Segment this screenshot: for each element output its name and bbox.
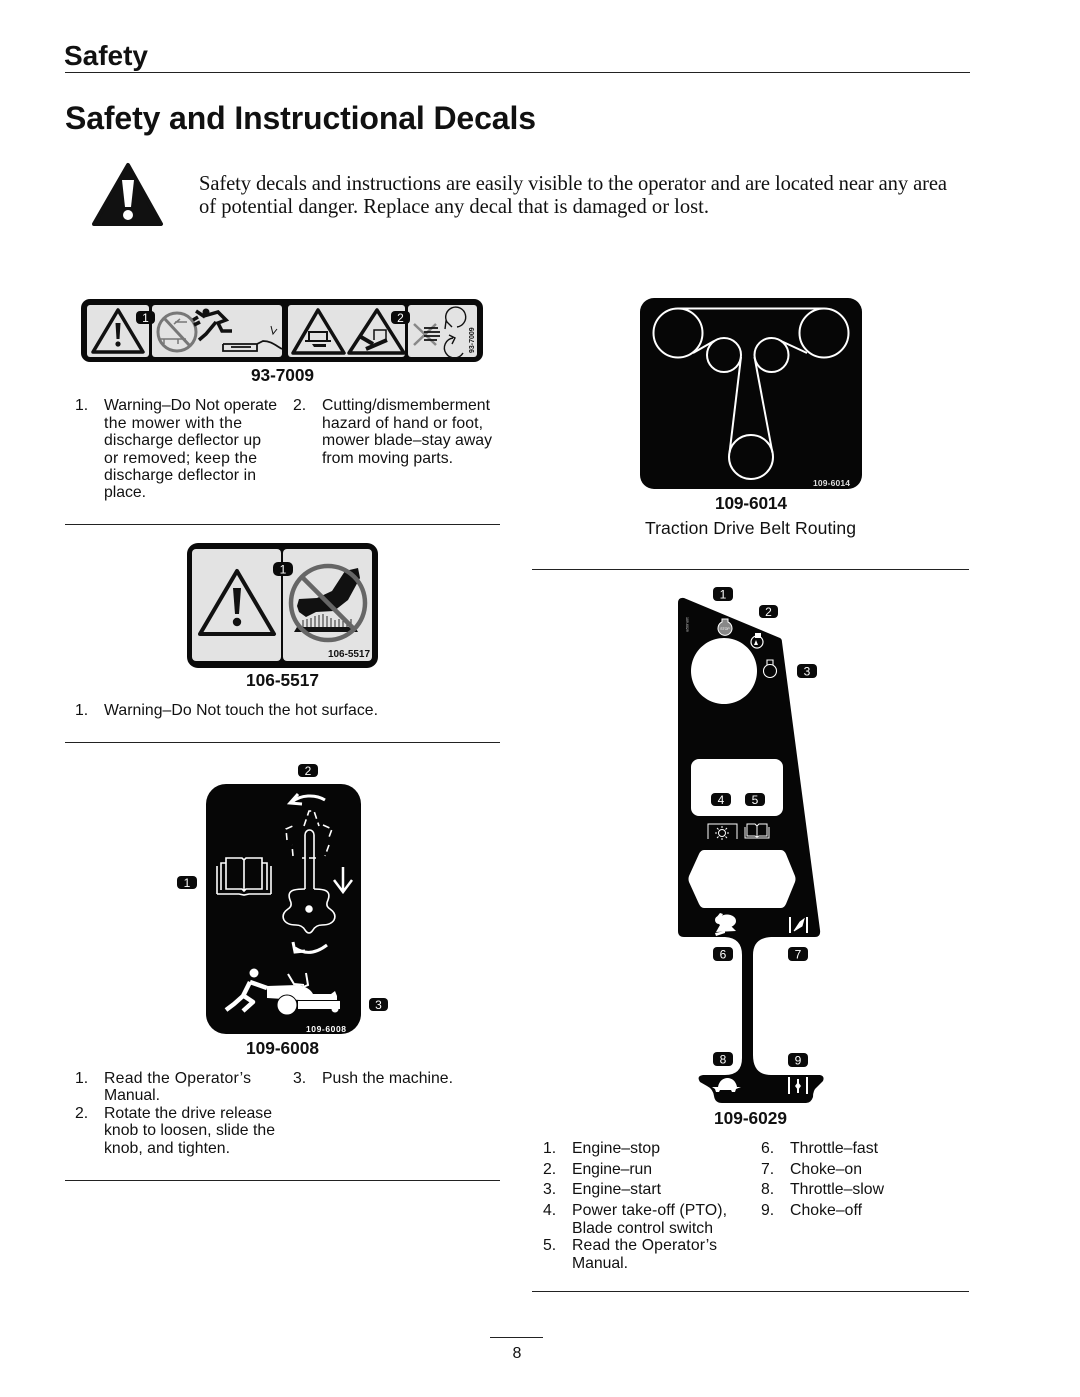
legend: 93-7009: 2. [293,397,306,414]
legend: 109-6008: 2. [75,1105,88,1122]
legend: 93-7009 [75,397,492,501]
legend: 106-5517: 1. [75,702,88,719]
decal number 93-7009: 93-7009 [251,365,314,385]
decal: 109-6029 control panel: 2 [765,605,772,619]
section heading: Safety: Safety [64,40,148,71]
decal: 109-6029 control panel: 1 [720,588,727,602]
legend: 109-6008: 1. [75,1070,88,1087]
decal: 106-5517 [187,543,378,668]
legend: 93-7009: or removed; keep the [104,450,257,467]
legend: 109-6029: 9. [761,1202,774,1219]
decal: 109-6008: 3 [375,998,382,1012]
decal: 109-6029 control panel: 6 [720,948,727,962]
legend: 109-6029: Throttle–slow [790,1181,885,1198]
icon: engine stop: STOP [720,627,730,631]
decal: 109-6008 [177,764,388,1034]
icon: warning triangle [94,165,161,224]
intro text: of potential danger. Replace any decal that is damaged or lost. [199,196,709,218]
legend: 109-6029: Engine–stop [572,1140,660,1157]
decal: 93-7009: 93-7009 [469,327,476,353]
legend: 109-6008: Rotate the drive release [104,1105,272,1122]
decal: 109-6029 control panel: 3 [804,664,811,678]
legend: 93-7009: discharge deflector in [104,467,256,484]
legend: 109-6029: Throttle–fast [790,1140,879,1157]
decal: 93-7009: 2 [397,311,404,325]
legend: 109-6029: Blade control switch [572,1220,713,1237]
legend: 109-6029: 7. [761,1161,774,1178]
icon: release knob [283,794,352,952]
legend: 93-7009: place. [104,484,146,501]
legend: 109-6029: 1. [543,1140,556,1157]
page number: 8 [513,1345,522,1362]
icon: engine stop [718,619,732,635]
icon: book small [745,824,769,838]
legend: 109-6008: knob to loosen, slide the [104,1122,275,1139]
decal: 109-6014 belt routing [640,298,862,489]
legend: 93-7009: from moving parts. [322,450,453,467]
decal number 106-5517: 106-5517 [246,670,319,690]
decal: 109-6029 control panel: 4 [718,793,725,807]
legend: 109-6029: Manual. [572,1255,628,1272]
legend: 109-6008: Push the machine. [322,1070,453,1087]
legend: 93-7009: Cutting/dismemberment [322,397,491,414]
legend: 109-6029: 2. [543,1161,556,1178]
decal: 109-6029 control panel: 7 [795,948,802,962]
intro text: Safety decals and instructions are easily visible to the operator and are located near any area [199,173,947,195]
icon: turtle [712,1078,741,1092]
decal: 106-5517: 106-5517 [328,649,370,660]
decal: 109-6029 control panel: 5 [752,793,759,807]
legend: 109-6029: 3. [543,1181,556,1198]
legend: 93-7009: Warning–Do Not operate [104,397,277,414]
icon: person pushing mower [226,968,340,1015]
legend: 109-6029 [543,1140,885,1272]
legend: 109-6008 [75,1070,453,1157]
decal: 109-6029 control panel: 9 [795,1054,802,1068]
decal: 109-6029 control panel [678,587,824,1103]
caption: traction drive belt routing: Traction Drive Belt Routing [645,518,856,538]
legend: 109-6029: Choke–off [790,1202,863,1219]
icon: book [217,858,271,895]
decal number 109-6029: 109-6029 [714,1108,787,1128]
page number [490,1337,543,1362]
icon: choke off [789,1077,807,1094]
decal: 109-6008: 2 [305,764,312,778]
legend: 109-6029: Engine–start [572,1181,662,1198]
icon: engine start [764,660,776,678]
icon: engine run [751,633,763,648]
legend: 93-7009: 1. [75,397,88,414]
icon: power take-off [708,824,737,840]
legend: 109-6008: Read the Operator’s [104,1070,251,1087]
icon: rabbit [715,913,736,936]
decal: 106-5517: 1 [280,562,287,576]
legend: 93-7009: discharge deflector up [104,432,261,449]
icon: choke on [790,917,807,933]
decal: 109-6029 control panel: 8 [720,1052,727,1066]
decal: 109-6008: 109-6008 [306,1024,346,1034]
decal: 109-6008: 1 [184,876,191,890]
legend: 109-6029: Read the Operator’s [572,1237,717,1254]
decal: 93-7009: 1 [142,311,149,325]
legend: 93-7009: mower blade–stay away [322,432,492,449]
legend: 93-7009: hazard of hand or foot, [322,415,483,432]
legend: 109-6029: 5. [543,1237,556,1254]
legend: 93-7009: the mower with the [104,415,242,432]
legend: 109-6008: Manual. [104,1087,160,1104]
decal: 109-6014 belt routing: 109-6014 [813,478,850,488]
legend: 109-6008: knob, and tighten. [104,1140,230,1157]
page title: Safety and Instructional Decals [65,100,536,136]
decal number 109-6008: 109-6008 [246,1038,319,1058]
legend: 109-6008: 3. [293,1070,306,1087]
legend: 109-6029: Choke–on [790,1161,862,1178]
decal: 109-6029 control panel: 109-6029 [685,617,689,632]
legend: 109-6029: 6. [761,1140,774,1157]
legend: 109-6029: Power take-off (PTO), [572,1202,727,1219]
decal number 109-6014: 109-6014 [715,493,787,513]
legend: 109-6029: Engine–run [572,1161,652,1178]
legend: 109-6029: 8. [761,1181,774,1198]
legend: 106-5517: Warning–Do Not touch the hot surface. [104,702,378,719]
decal: 93-7009 [81,299,483,362]
intro text [199,173,947,218]
legend: 109-6029: 4. [543,1202,556,1219]
